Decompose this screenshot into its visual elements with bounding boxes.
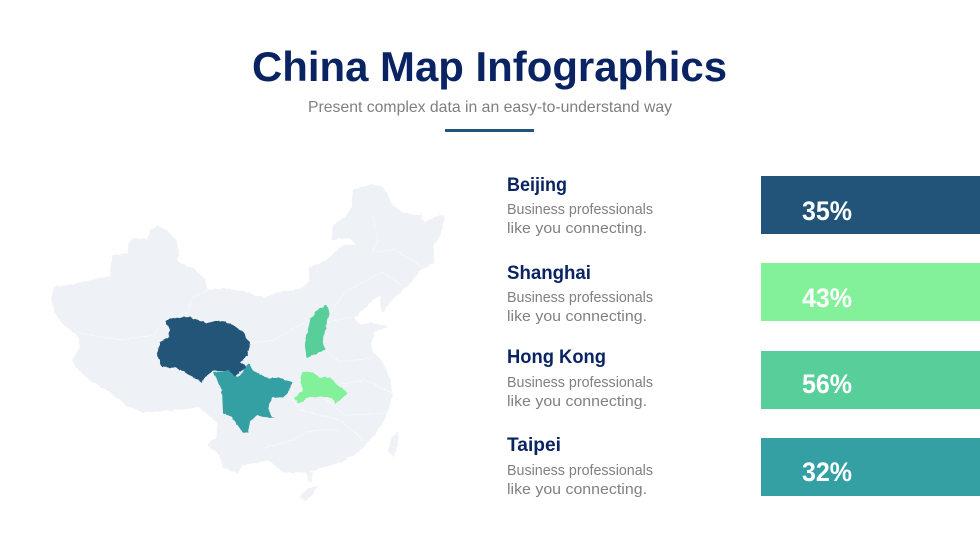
bar: 43%: 43% <box>802 283 852 313</box>
subtitle: Present complex data in an easy-to-understand way <box>308 99 672 116</box>
bar: 35%: 35% <box>802 196 852 226</box>
title underline <box>445 129 534 132</box>
item: Shanghai <box>507 263 653 325</box>
item: Shanghai: like you connecting. <box>507 309 647 325</box>
Hainan <box>300 486 318 501</box>
item: Hong Kong: Hong Kong <box>507 347 606 368</box>
item: Beijing: like you connecting. <box>507 221 647 237</box>
bar: 32% <box>761 438 980 496</box>
item: Taipei: like you connecting. <box>507 482 647 498</box>
title: China Map Infographics <box>252 43 727 90</box>
bar: 35% <box>761 176 980 234</box>
item: Hong Kong: like you connecting. <box>507 394 647 410</box>
item: Taipei: Taipei <box>507 435 561 456</box>
region: teal province <box>213 363 292 433</box>
item: Hong Kong: Business professionals <box>507 375 653 391</box>
region: dark blue province <box>157 317 250 383</box>
Leizhou peninsula <box>306 472 313 482</box>
region: mid green province <box>305 305 330 358</box>
Taiwan <box>388 432 398 458</box>
provincial borders <box>75 215 425 448</box>
item: Beijing: Business professionals <box>507 202 653 218</box>
bar: 32%: 32% <box>802 457 852 487</box>
item: Shanghai: Business professionals <box>507 290 653 306</box>
bar: 43% <box>761 263 980 321</box>
item: Hong Kong <box>507 347 653 410</box>
mainland base map <box>52 185 444 473</box>
bar: 56%: 56% <box>802 369 852 399</box>
bar: 56% <box>761 351 980 409</box>
item: Beijing <box>507 175 653 237</box>
item: Taipei <box>507 435 653 498</box>
map of China <box>52 185 444 501</box>
region: light green province <box>294 372 348 404</box>
item: Shanghai: Shanghai <box>507 263 591 284</box>
item: Taipei: Business professionals <box>507 463 653 479</box>
item: Beijing: Beijing <box>507 175 567 196</box>
